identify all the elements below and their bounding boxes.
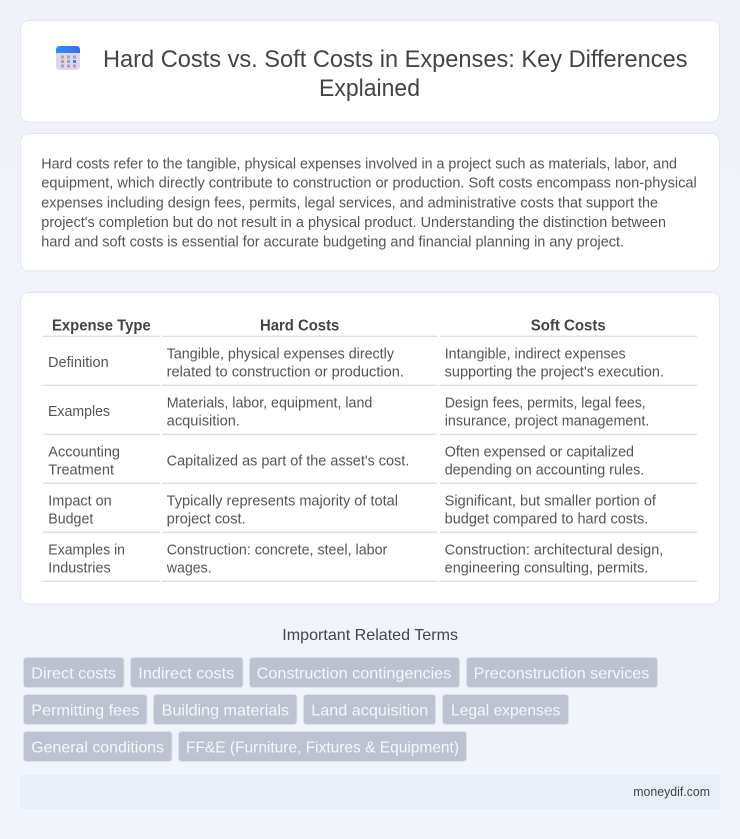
table row: definition: Tangible, physical expenses directly: [167, 346, 395, 362]
table row: examples in industries: [48, 542, 663, 576]
panel: related term tags: [24, 658, 658, 762]
tag: general conditions: [24, 732, 172, 762]
title: Hard Costs vs. Soft Costs in Expenses: Key Differences: [103, 46, 688, 73]
tag: building materials: [154, 694, 297, 724]
table row: examples: [48, 395, 649, 429]
tag: construction contingencies: Construction contingencies: [257, 665, 451, 682]
table header: Soft Costs: [531, 318, 606, 335]
table row: examples in industries: engineering consulting, permits.: [445, 560, 648, 576]
tag: preconstruction services: [466, 658, 658, 688]
tag: general conditions: General conditions: [31, 739, 164, 756]
footer bar: [20, 775, 720, 809]
tag: indirect costs: [130, 658, 243, 688]
panel: header: [20, 20, 720, 122]
tag: legal expenses: [442, 694, 568, 724]
text block: definition paragraph: hard and soft costs is essential for accurate budgeting and financial planning in any project.: [41, 235, 624, 251]
table row: definition: Definition: [48, 355, 109, 371]
tag: FF&E: [178, 732, 466, 762]
table row: examples: Materials, labor, equipment, land: [167, 395, 372, 411]
text block: definition paragraph: [41, 156, 697, 251]
table row: impact on budget: budget compared to hard costs.: [445, 511, 648, 527]
tag: building materials: Building materials: [162, 702, 289, 719]
table header: [52, 318, 606, 335]
table row: examples in industries: Examples in: [48, 542, 125, 558]
icon: calendar: [56, 46, 80, 70]
table row: impact on budget: [48, 493, 657, 527]
table row: impact on budget: project cost.: [167, 511, 246, 527]
table row: impact on budget: Impact on: [48, 493, 112, 509]
table row: examples in industries: Construction: concrete, steel, labor: [167, 542, 387, 558]
text block: definition paragraph: project's completion but do not result in a physical product. Understanding the distinction between: [41, 215, 666, 231]
table row: accounting treatment: Often expensed or capitalized: [445, 444, 634, 460]
table row: accounting treatment: depending on accounting rules.: [445, 462, 644, 478]
tag: land acquisition: [304, 694, 436, 724]
footer bar: moneydif.com: [633, 785, 710, 799]
table row: examples in industries: wages.: [166, 560, 212, 576]
table row: definition: supporting the project's execution.: [445, 364, 664, 380]
table header: Expense Type: [52, 318, 151, 335]
title: [103, 46, 688, 102]
table row: impact on budget: Typically represents majority of total: [167, 493, 398, 509]
title: Explained: [319, 75, 420, 102]
panel: comparison table: [20, 292, 720, 604]
table row: accounting treatment: [48, 444, 644, 478]
table row: examples: insurance, project management.: [445, 413, 649, 429]
table row: examples: Examples: [48, 404, 110, 420]
tag: legal expenses: Legal expenses: [451, 702, 560, 719]
table row: definition: related to construction or production.: [167, 364, 404, 380]
table row: examples in industries: Construction: architectural design,: [445, 542, 663, 558]
tag: direct costs: [24, 658, 124, 688]
tag: preconstruction services: Preconstruction services: [474, 665, 649, 682]
table row: definition: [48, 346, 664, 380]
table header: Hard Costs: [260, 318, 339, 335]
heading: important related terms: Important Related Terms: [282, 627, 458, 644]
text block: definition paragraph: expenses including design fees, permits, legal services, and administrative costs that support the: [41, 196, 658, 212]
text block: definition paragraph: Hard costs refer to the tangible, physical expenses involved in a project such as materials, labor, and: [41, 156, 677, 172]
tag: permitting fees: [24, 694, 147, 724]
table row: accounting treatment: Accounting: [48, 444, 120, 460]
table row: impact on budget: Budget: [48, 511, 93, 527]
table row: accounting treatment: Capitalized as part of the asset's cost.: [167, 453, 409, 469]
panel: introduction: [20, 134, 720, 271]
table row: impact on budget: Significant, but smaller portion of: [445, 493, 657, 509]
tag: FF&E: FF&E (Furniture, Fixtures & Equipment): [186, 739, 459, 756]
table row: examples: acquisition.: [167, 413, 240, 429]
tag: permitting fees: Permitting fees: [31, 702, 139, 719]
table row: definition: Intangible, indirect expenses: [445, 346, 626, 362]
tag: indirect costs: Indirect costs: [138, 665, 234, 682]
tag: land acquisition: Land acquisition: [311, 702, 428, 719]
tag: construction contingencies: [250, 658, 460, 688]
tag: direct costs: Direct costs: [31, 665, 116, 682]
text block: definition paragraph: equipment, which directly contribute to construction or production. Soft costs encompass non-physical: [41, 176, 697, 192]
table row: examples: Design fees, permits, legal fees,: [445, 395, 646, 411]
table row: accounting treatment: Treatment: [48, 462, 114, 478]
table row: examples in industries: Industries: [48, 560, 111, 576]
